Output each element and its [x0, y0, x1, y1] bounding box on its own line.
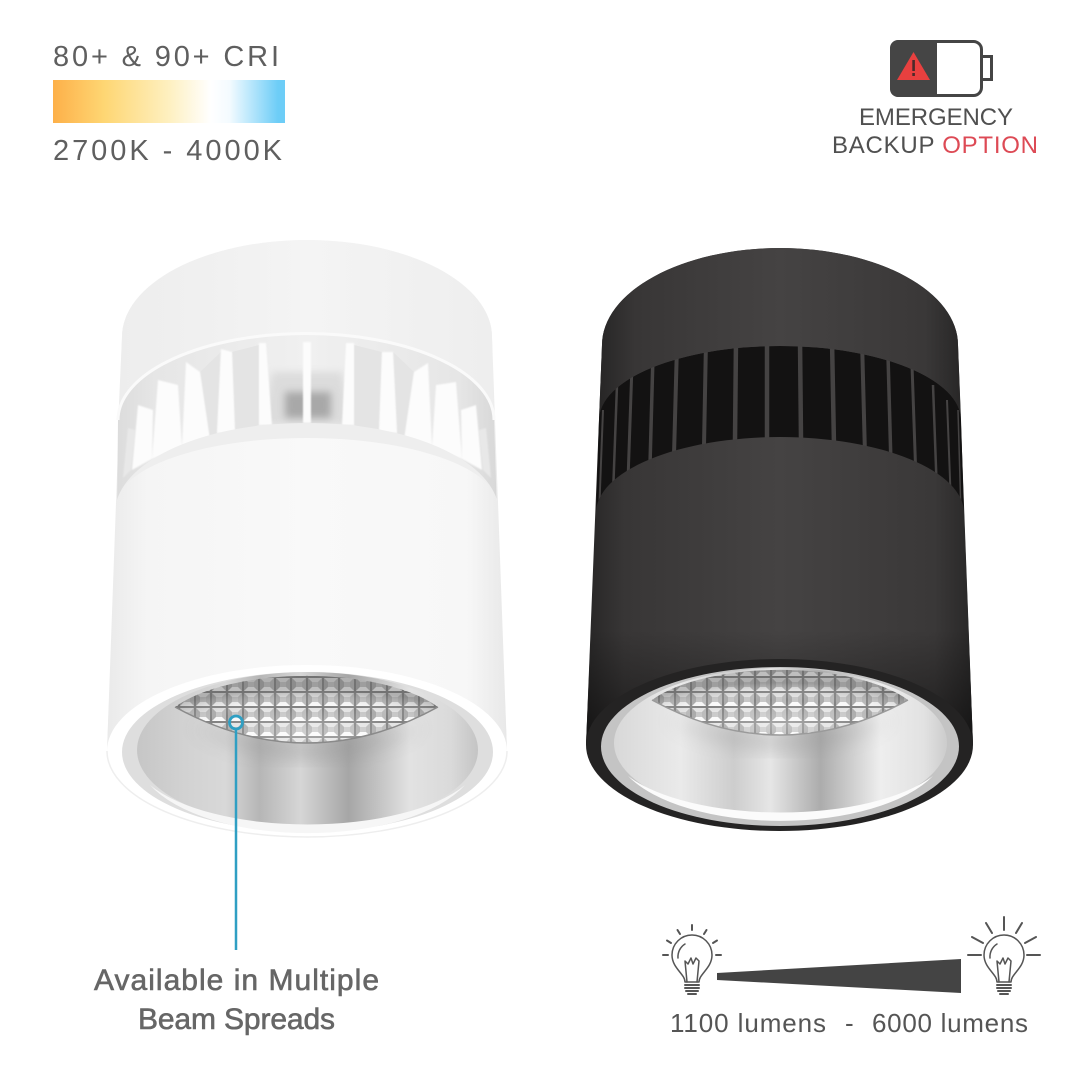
- lower body: [107, 438, 507, 751]
- upper housing: [599, 248, 961, 420]
- white body: [107, 240, 507, 751]
- lens glow: [652, 670, 908, 735]
- lower black body: [586, 437, 973, 745]
- colour temperature gradient bar: [53, 80, 285, 123]
- reflector lower highlight: [150, 785, 465, 833]
- reflector lower highlight: [628, 776, 933, 821]
- range dash: -: [845, 1008, 854, 1038]
- icon: low battery with warning: [890, 40, 992, 97]
- recess shading: [262, 372, 352, 425]
- colour temperature range: 2700K - 4000K: [53, 135, 283, 167]
- fin ledge: [117, 423, 497, 513]
- recess top lip: [118, 334, 494, 420]
- wedge: lumen scale: [717, 959, 961, 993]
- recess shadow: [285, 392, 331, 418]
- lens assembly: [175, 676, 438, 758]
- backup option label: BACKUP OPTION: [832, 132, 1038, 159]
- lens assembly: [652, 670, 908, 749]
- heat sink recess: [117, 334, 497, 588]
- leader marker: [230, 716, 242, 729]
- white top housing: [118, 240, 494, 425]
- black body: [586, 248, 973, 745]
- icon: bright bulb: [968, 917, 1040, 994]
- lumen minimum: 1100 lumens: [670, 1008, 826, 1038]
- lens edge: [175, 707, 438, 743]
- black heat sink slots: [596, 346, 964, 589]
- fin side faces: [200, 345, 414, 440]
- icon: small bulb: [663, 925, 721, 994]
- shadow below lens: [215, 730, 401, 763]
- callout line one: Available in Multiple: [94, 964, 379, 997]
- heat sink ribs: [599, 340, 961, 515]
- lower shadow: [586, 630, 973, 745]
- heat sink fins: [123, 342, 491, 478]
- lens glow: [175, 676, 438, 743]
- silver trim ring: [601, 667, 959, 826]
- silver reflector: [614, 668, 947, 818]
- callout line two: Beam Spreads: [138, 1003, 335, 1036]
- black downlight fixture: [586, 248, 973, 831]
- CRI label: 80+ & 90+ CRI: [53, 41, 279, 73]
- lumen range: [663, 917, 1040, 1038]
- prismatic lens: [175, 676, 438, 743]
- colour rendering and temperature block: [53, 41, 285, 167]
- silver trim ring: [122, 672, 493, 832]
- leader line: [235, 730, 237, 950]
- white downlight fixture: [107, 240, 507, 837]
- emergency backup block: [832, 40, 1038, 159]
- emergency label: EMERGENCY: [859, 104, 1013, 131]
- prismatic lens: [652, 670, 908, 735]
- white rim: [107, 665, 507, 837]
- black rim: [586, 659, 973, 831]
- lens edge: [652, 700, 908, 735]
- silver reflector: [137, 672, 478, 828]
- callout: beam spreads: [94, 716, 379, 1036]
- lumen maximum: 6000 lumens: [872, 1008, 1028, 1038]
- rim lower shadow: [107, 751, 507, 837]
- shadow below lens: [692, 725, 865, 755]
